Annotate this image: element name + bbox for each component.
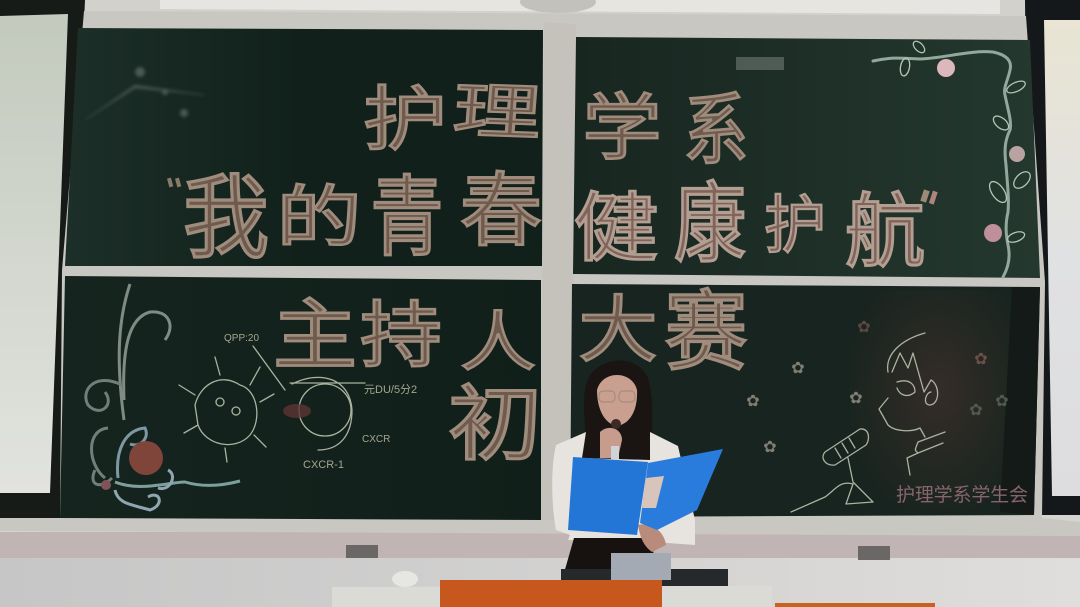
pinkish wall strip under tray (0, 532, 1080, 559)
title line 2: 护 (764, 191, 826, 261)
title line 2: 健 (574, 186, 658, 270)
vine with flowers top right (873, 39, 1033, 277)
chalk flowers on bottom right board: ✿ (995, 391, 1009, 410)
right projection screen (1044, 20, 1080, 496)
title line 1: 理 (451, 77, 543, 147)
title line 3: 人 (460, 306, 536, 378)
title line 1 (363, 77, 748, 174)
cell sketch with labels: 元DU/5分2 (364, 383, 417, 396)
cell sketch with labels: CXCR-1 (303, 459, 344, 471)
top left faint flower sprig (85, 67, 205, 120)
reddish glow on bottom right board (850, 290, 1012, 514)
chalk flowers on bottom right board: ✿ (746, 391, 760, 410)
board panel: top left (65, 28, 543, 266)
lectern (332, 586, 772, 607)
signature: nursing department student union: 护理学系学生会 (896, 484, 1028, 506)
girl profile sketch (879, 333, 945, 475)
chalk flowers on bottom right board: ✿ (791, 358, 805, 377)
lower pale wall (0, 558, 1080, 607)
chalk flowers on bottom right board: ✿ (849, 388, 863, 407)
chalk swirl and flower bottom left (86, 284, 240, 510)
chalk tray clips (346, 545, 890, 560)
cell sketch with labels (283, 377, 417, 471)
presenter (552, 360, 695, 580)
upper frame strip (78, 0, 1030, 40)
hair (582, 360, 653, 462)
hand and microphone (600, 428, 622, 458)
dark side panel right (1025, 0, 1080, 515)
title line 2: 春 (460, 168, 542, 256)
lower hand (638, 524, 666, 552)
title line 3: 主 (273, 293, 357, 379)
title line 2: 康 (674, 176, 746, 272)
chalk flowers on bottom right board: ✿ (763, 437, 777, 456)
title line 4: 初 (448, 378, 542, 470)
virus sketch (179, 333, 285, 462)
chalk flowers on bottom right board: ✿ (857, 317, 871, 336)
title line 1: 学 (582, 89, 662, 169)
board panel: bottom right (570, 284, 1040, 517)
orange lectern top (440, 580, 662, 607)
cell sketch with labels: CXCR (362, 434, 390, 445)
title line 2 (167, 167, 938, 276)
title line 2: 航 (845, 187, 925, 277)
board panel: bottom left (60, 276, 541, 520)
dark right edge of bottom right board (1000, 287, 1040, 515)
face (597, 375, 637, 426)
orange strip right (775, 603, 935, 607)
title line 2: 我 (183, 167, 269, 269)
left projection screen (0, 14, 68, 493)
board panel: top right (573, 37, 1040, 278)
white blouse (552, 432, 695, 545)
title line 3: 持 (360, 296, 442, 376)
dark side panel left (0, 0, 85, 518)
chalk flowers on bottom right board: ✿ (969, 400, 983, 419)
title line 1: 系 (684, 88, 748, 174)
centre pillar (541, 22, 576, 520)
device on lectern (561, 553, 728, 586)
skirt (562, 538, 660, 580)
title line 3 (273, 284, 747, 382)
title line 2: 青 (370, 169, 444, 267)
microphone sketch (791, 429, 873, 512)
chalk flowers on bottom right board (746, 317, 1009, 456)
title line 3: 大 (578, 291, 658, 371)
chalk flowers on bottom right board: ✿ (974, 349, 988, 368)
title line 2: 的 (276, 181, 362, 255)
small white cup (392, 571, 418, 587)
glasses (599, 391, 635, 402)
title line 3: 赛 (665, 284, 747, 382)
ceiling light fixture (520, 0, 596, 13)
blue folder (568, 449, 723, 535)
virus sketch: QPP:20 (224, 333, 259, 344)
eraser on top right board (736, 57, 784, 70)
title line 1: 护 (363, 81, 447, 159)
ceiling bright band (160, 0, 1000, 14)
title characters (167, 77, 938, 470)
